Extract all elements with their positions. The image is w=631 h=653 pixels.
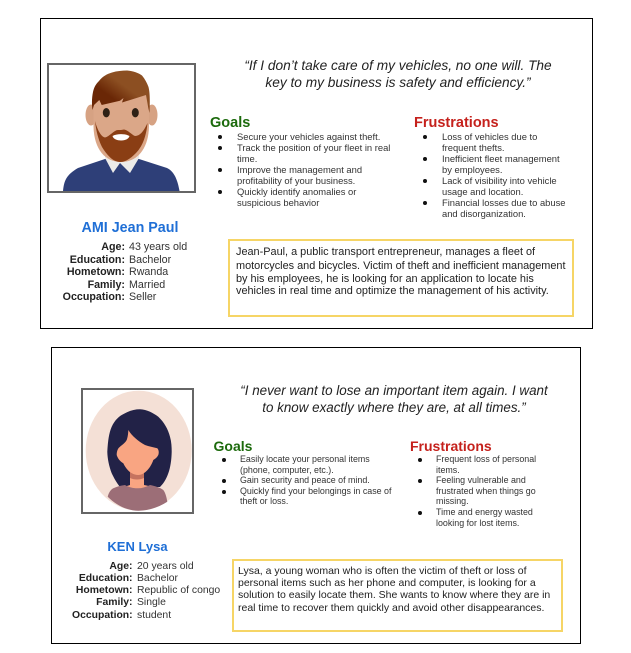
- heading: KEN Lysa: KEN Lysa: [107, 539, 168, 554]
- list: frustrations KEN: Time and energy wasted: [436, 507, 533, 517]
- text block: profile details KEN: Age:: [109, 560, 132, 572]
- heading: AMI Jean Paul: AMI Jean Paul: [82, 220, 178, 236]
- callout: bio AMI: motorcycles and bicycles. Victim of theft and inefficient management: [236, 260, 566, 272]
- text block: profile details AMI: Hometown:: [67, 266, 125, 278]
- list: frustrations AMI: usage and location.: [442, 186, 523, 197]
- text block: profile details AMI: Age:: [101, 241, 125, 253]
- text block: profile details KEN: Single: [137, 597, 166, 608]
- heading: Frustrations AMI: Frustrations: [414, 115, 499, 131]
- list: frustrations AMI: by employees.: [442, 164, 502, 175]
- list: goals AMI: Secure your vehicles against theft.: [237, 131, 380, 142]
- list: frustrations KEN: missing.: [436, 496, 469, 506]
- list: frustrations AMI: Lack of visibility into vehicle: [442, 175, 557, 186]
- callout: bio KEN: personal items such as her phone and computer, is looking for a: [238, 577, 536, 589]
- icon: female avatar portrait: [81, 388, 194, 514]
- quote: AMI: [244, 58, 552, 90]
- list: frustrations AMI: Loss of vehicles due to: [442, 131, 537, 142]
- list: goals AMI: Track the position of your fleet in real: [237, 142, 390, 153]
- list: goals KEN: (phone, computer, etc.).: [240, 465, 334, 475]
- list: frustrations AMI: [423, 131, 566, 219]
- heading: Goals KEN: Goals: [214, 438, 252, 454]
- list: goals AMI: Quickly identify anomalies or: [237, 186, 356, 197]
- text block: profile details KEN: Occupation:: [72, 610, 133, 620]
- text block: profile details KEN: Family:: [96, 597, 132, 608]
- quote: AMI: key to my business is safety and efficiency.”: [265, 75, 531, 90]
- list: goals KEN: Gain security and peace of mind.: [240, 475, 370, 485]
- text block: profile details KEN: Hometown:: [76, 585, 132, 596]
- list: goals AMI: suspicious behavior: [237, 197, 319, 208]
- text block: profile details AMI: Seller: [129, 291, 156, 303]
- callout: bio KEN: solution to easily locate them. She wants to know where they are in: [238, 589, 550, 601]
- list: frustrations KEN: frustrated when things go: [436, 486, 536, 496]
- text block: profile details AMI: Bachelor: [129, 254, 171, 266]
- list: frustrations AMI: frequent thefts.: [442, 142, 505, 153]
- text block: profile details AMI: 43 years old: [129, 241, 187, 253]
- text block: profile details AMI: Education:: [70, 254, 125, 266]
- heading: Frustrations KEN: Frustrations: [410, 438, 492, 454]
- text block: profile details KEN: Republic of congo: [137, 585, 220, 596]
- callout: bio KEN: [232, 558, 563, 632]
- heading: Goals AMI: Goals: [210, 115, 250, 131]
- callout: bio AMI: Jean-Paul, a public transport entrepreneur, manages a fleet of: [236, 246, 535, 258]
- list: frustrations KEN: looking for lost items.: [436, 518, 519, 528]
- quote: KEN: “I never want to lose an important item again. I want: [240, 383, 548, 398]
- panel: persona card KEN Lysa: [51, 347, 581, 644]
- list: frustrations AMI: Inefficient fleet management: [442, 153, 560, 164]
- callout: bio AMI: vehicles in real time and optimize the management of his activity.: [236, 285, 549, 297]
- text block: profile details AMI: Married: [129, 279, 165, 291]
- callout: bio AMI: [228, 239, 574, 317]
- list: goals AMI: [218, 131, 390, 208]
- text block: profile details KEN: student: [137, 610, 171, 620]
- text block: profile details KEN: [72, 560, 220, 620]
- list: goals AMI: time.: [237, 153, 257, 164]
- panel: persona card AMI Jean Paul: [40, 18, 593, 329]
- list: goals AMI: profitability of your business.: [237, 175, 355, 186]
- callout: bio KEN: Lysa, a young woman who is often the victim of theft or loss of: [238, 565, 527, 577]
- callout: bio KEN: real time to recover them quickly and avoid other disappearances.: [238, 602, 544, 614]
- list: frustrations KEN: [418, 454, 536, 528]
- text block: profile details KEN: 20 years old: [137, 560, 194, 572]
- list: frustrations KEN: Frequent loss of personal: [436, 454, 536, 464]
- list: frustrations KEN: Feeling vulnerable and: [436, 475, 526, 485]
- text block: profile details AMI: [63, 241, 187, 303]
- callout: bio AMI: by his employees, he is looking for an application to locate his: [236, 272, 534, 284]
- text block: profile details KEN: Education:: [79, 573, 132, 584]
- list: frustrations AMI: and disorganization.: [442, 208, 526, 219]
- list: goals KEN: Quickly find your belongings in case of: [240, 486, 391, 496]
- quote: KEN: to know exactly where they are, at all times.”: [262, 400, 526, 414]
- quote: AMI: “If I don’t take care of my vehicles, no one will. The: [244, 58, 552, 73]
- list: frustrations AMI: Financial losses due to abuse: [442, 197, 566, 208]
- list: goals KEN: Easily locate your personal items: [240, 454, 370, 464]
- text block: profile details KEN: Bachelor: [137, 573, 178, 584]
- list: goals AMI: Improve the management and: [237, 164, 362, 175]
- list: goals KEN: theft or loss.: [240, 496, 288, 506]
- list: goals KEN: [222, 454, 392, 506]
- list: frustrations KEN: items.: [436, 465, 460, 475]
- text block: profile details AMI: Occupation:: [63, 291, 125, 303]
- quote: KEN: [240, 383, 548, 415]
- text block: profile details AMI: Rwanda: [129, 266, 168, 278]
- icon: male avatar portrait: [47, 63, 196, 193]
- text block: profile details AMI: Family:: [88, 279, 125, 291]
